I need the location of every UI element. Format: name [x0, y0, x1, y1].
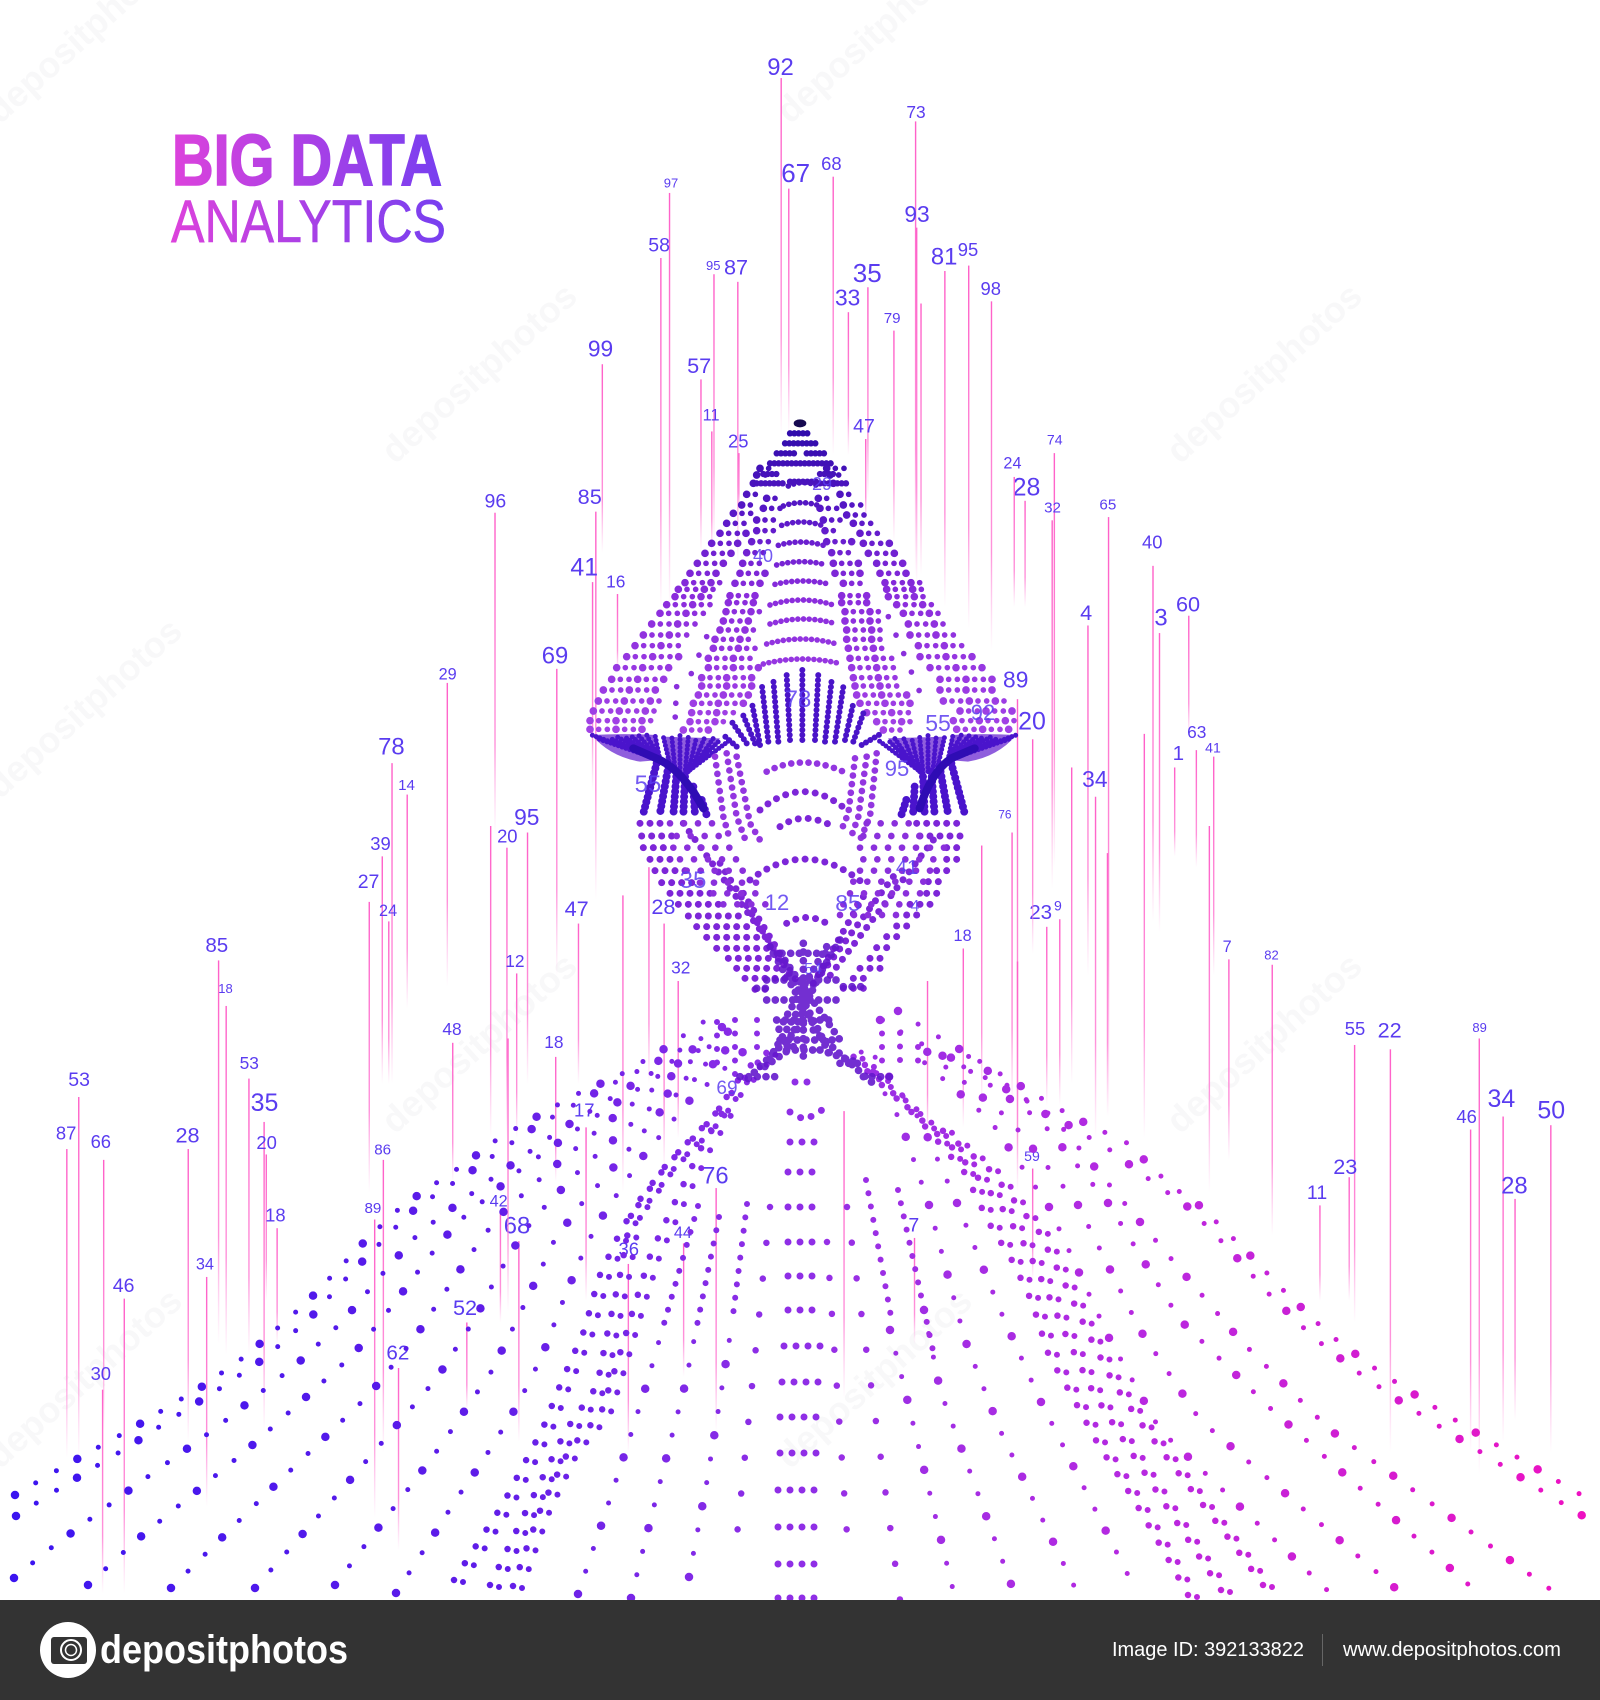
spike 20b: 20 [256, 1132, 277, 1153]
spike 62: 62 [386, 1341, 409, 1364]
spike 47 [853, 416, 875, 520]
spike 89c: 89 [1472, 1020, 1487, 1035]
spike 65: 65 [1099, 496, 1116, 513]
spike 25 [728, 431, 748, 509]
spike 78: 78 [378, 733, 405, 760]
spike 14: 14 [398, 777, 415, 794]
spike 24b: 24 [1003, 454, 1021, 472]
spike 85b: 85 [205, 934, 228, 957]
pyramid apex [794, 419, 806, 427]
spike 48: 48 [442, 1019, 462, 1039]
spike 69: 69 [542, 642, 568, 669]
spike 79: 79 [884, 310, 901, 327]
labels drawn over the shape: 41 [896, 857, 918, 879]
logo text: depositphotos [100, 1628, 348, 1672]
spike 32b: 32 [1044, 500, 1061, 517]
centre rows [763, 483, 842, 664]
spike 46b: 46 [1456, 1106, 1477, 1127]
spike 98: 98 [981, 278, 1001, 299]
spike 28c [1013, 473, 1040, 607]
spike 85: 85 [578, 484, 602, 509]
spike 95c: 95 [514, 804, 539, 830]
spike 7b: 7 [1223, 938, 1232, 956]
labels drawn over the shape: 55 [925, 710, 951, 736]
bowl sparse interior dots [670, 823, 947, 915]
logo icon [40, 1622, 96, 1678]
spike 68b: 68 [504, 1213, 530, 1240]
watermark pattern: depositphotos [1158, 275, 1370, 471]
spike 3: 3 [1154, 604, 1168, 631]
spike 87b: 87 [56, 1122, 76, 1143]
spike 23: 23 [1029, 901, 1052, 924]
spike 27: 27 [358, 871, 379, 893]
watermark pattern: depositphotos [1158, 945, 1370, 1141]
spike 67: 67 [781, 158, 810, 188]
spike 46: 46 [113, 1275, 134, 1297]
spike 59 [1024, 1148, 1040, 1279]
spike 41b: 41 [1205, 739, 1221, 755]
spike 18b: 18 [265, 1205, 286, 1226]
spike 33: 33 [835, 285, 860, 311]
spike 28b: 28 [651, 894, 675, 919]
spike 20: 20 [497, 825, 518, 846]
labels drawn over the shape: 95 [885, 756, 909, 781]
labels drawn over the shape: 40 [753, 546, 773, 566]
spike 4: 4 [1080, 600, 1092, 625]
image id: Image ID: 392133822 [1112, 1639, 1304, 1661]
spike 41: 41 [570, 554, 598, 582]
lower bowl and neck [640, 792, 967, 1087]
labels drawn over the shape [635, 474, 995, 1099]
title [171, 121, 446, 255]
arch fan [723, 667, 882, 747]
neck dense dots [740, 940, 893, 1087]
outer rows [590, 468, 1017, 729]
labels drawn over the shape: 55 [635, 771, 661, 798]
spike 99: 99 [588, 336, 613, 362]
spike 23b: 23 [1333, 1154, 1357, 1179]
spike 63: 63 [1187, 722, 1206, 742]
spike 42 [490, 1192, 508, 1322]
spike 42: 42 [490, 1192, 508, 1210]
spike 40: 40 [1142, 532, 1163, 553]
spike 34: 34 [196, 1255, 214, 1273]
spike 20c: 20 [1018, 708, 1046, 736]
spike 18: 18 [218, 981, 233, 996]
spike 86: 86 [374, 1141, 391, 1158]
scatter fill [668, 617, 922, 725]
spike 18c: 18 [544, 1032, 564, 1052]
spike 7: 7 [908, 1214, 919, 1236]
spike 68: 68 [821, 153, 842, 174]
spike 32: 32 [671, 957, 690, 977]
spike 34c: 34 [1487, 1085, 1515, 1113]
spike 73: 73 [906, 102, 926, 122]
website: www.depositphotos.com [1342, 1639, 1561, 1661]
labels drawn over the shape: 35 [680, 867, 706, 894]
labels drawn over the shape: 29 [812, 474, 832, 494]
spike 17: 17 [574, 1100, 595, 1121]
spike 89: 89 [364, 1200, 381, 1217]
spike 87: 87 [724, 254, 748, 279]
labels drawn over the shape: 4 [911, 898, 920, 915]
labels drawn over the shape: 54 [804, 961, 822, 978]
spike 58: 58 [648, 234, 670, 256]
spike 11: 11 [703, 407, 720, 425]
middle rows [683, 498, 913, 730]
spike 28c: 28 [1013, 473, 1040, 501]
spike 22: 22 [1378, 1017, 1402, 1042]
spike 50: 50 [1537, 1097, 1565, 1125]
spike 92: 92 [767, 54, 794, 81]
left wing fan [592, 734, 730, 815]
spike 53: 53 [240, 1053, 259, 1073]
spike 95b: 95 [706, 258, 721, 273]
spike 55: 55 [1345, 1018, 1365, 1039]
spike 95: 95 [958, 239, 978, 260]
watermark pattern: depositphotos [373, 275, 585, 471]
labels drawn over the shape: 92 [971, 700, 995, 725]
pyramid top rows [757, 433, 847, 483]
spike 44: 44 [674, 1224, 692, 1242]
spike 74: 74 [1047, 431, 1063, 447]
spike 11b: 11 [1307, 1182, 1327, 1204]
spike 7 [908, 1214, 919, 1344]
spike 93: 93 [904, 201, 930, 227]
spike 66: 66 [91, 1131, 111, 1152]
spike 1 [1173, 742, 1184, 856]
labels drawn over the shape: 85 [835, 890, 861, 916]
spike 18d: 18 [954, 927, 972, 945]
spike 11b [1307, 1182, 1327, 1301]
spike 36: 36 [618, 1238, 639, 1259]
spike 30: 30 [91, 1363, 111, 1384]
spike 35b: 35 [251, 1089, 278, 1117]
spike 9: 9 [1054, 898, 1062, 914]
spike 47: 47 [853, 416, 875, 438]
watermark pattern: depositphotos [768, 1280, 980, 1476]
spike 52: 52 [453, 1295, 477, 1320]
bowl dot rows [640, 792, 967, 989]
spike 1: 1 [1173, 742, 1184, 765]
spike 16: 16 [606, 572, 625, 592]
title line 1: BIG DATA [172, 121, 442, 201]
pyramid [590, 419, 1017, 843]
spike 57: 57 [687, 353, 711, 378]
title line 2: ANALYTICS [171, 188, 446, 255]
spike 59: 59 [1024, 1148, 1040, 1164]
watermark pattern [0, 0, 1370, 1476]
spike 18b [265, 1205, 286, 1344]
spike 34b: 34 [1082, 766, 1107, 792]
spike 35: 35 [853, 258, 882, 288]
spike 76: 76 [702, 1163, 729, 1190]
spike 97: 97 [664, 176, 678, 191]
spike 81: 81 [931, 243, 957, 270]
labels drawn over the shape: 78 [785, 686, 811, 713]
spike 28: 28 [175, 1123, 200, 1148]
centre row dots [778, 1082, 826, 1598]
spike 53b: 53 [68, 1069, 90, 1091]
spike 12: 12 [505, 951, 525, 971]
terrain dot field [14, 1011, 1583, 1600]
spike 29: 29 [439, 666, 457, 684]
right wing fan [878, 734, 1016, 815]
labels drawn over the shape: 12 [765, 890, 789, 915]
spike 28d: 28 [1501, 1172, 1528, 1199]
watermark pattern: depositphotos [373, 945, 585, 1141]
spike 47b: 47 [565, 896, 589, 921]
inner streaks [715, 753, 877, 843]
spike 96: 96 [485, 490, 506, 512]
spike 89b: 89 [1003, 666, 1028, 692]
unlabelled spikes [490, 304, 1210, 1398]
spike 16 [606, 572, 625, 672]
spike 25: 25 [728, 431, 748, 452]
spike 82: 82 [1264, 947, 1279, 962]
spike 39: 39 [370, 833, 391, 854]
footer bar [0, 1600, 1600, 1700]
spike 76b: 76 [998, 807, 1012, 821]
labels drawn over the shape: 69 [716, 1078, 738, 1099]
spike 24: 24 [379, 902, 397, 920]
spike 60: 60 [1176, 591, 1200, 616]
spike 52 [453, 1295, 477, 1409]
